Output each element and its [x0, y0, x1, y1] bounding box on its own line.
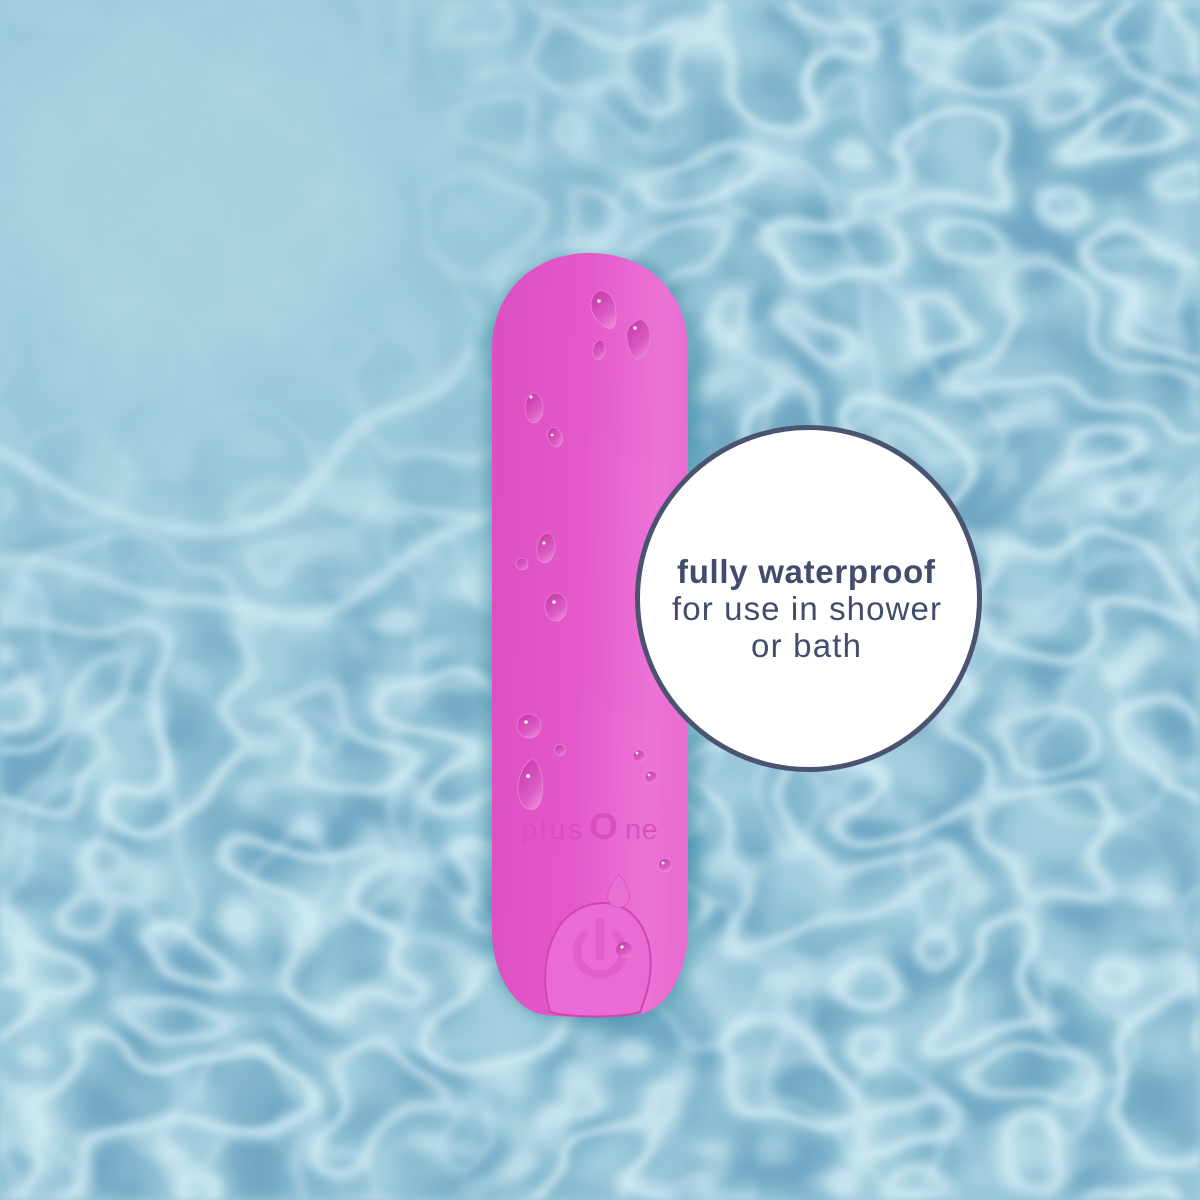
callout text: fully waterproof	[677, 553, 936, 590]
embossed logo: plusOne: plus	[521, 814, 585, 846]
callout text: or bath	[751, 627, 861, 664]
soft shadow under device	[486, 258, 700, 1023]
product: pink device	[492, 253, 688, 1017]
water droplets	[516, 291, 672, 872]
embossed logo: plusOne: O	[589, 806, 618, 847]
callout text	[672, 553, 941, 664]
pale hazy water, upper left	[0, 30, 380, 370]
callout circle	[638, 428, 980, 770]
droplet on button	[616, 942, 632, 958]
callout text: for use in shower	[672, 590, 941, 627]
embossed logo: plusOne: ne	[625, 814, 658, 846]
droplet highlights	[524, 299, 664, 864]
device body	[492, 253, 688, 1017]
droplet above button	[608, 875, 629, 907]
broad ripple arcs	[0, 350, 490, 618]
power button	[545, 875, 651, 1016]
power icon	[577, 922, 623, 975]
